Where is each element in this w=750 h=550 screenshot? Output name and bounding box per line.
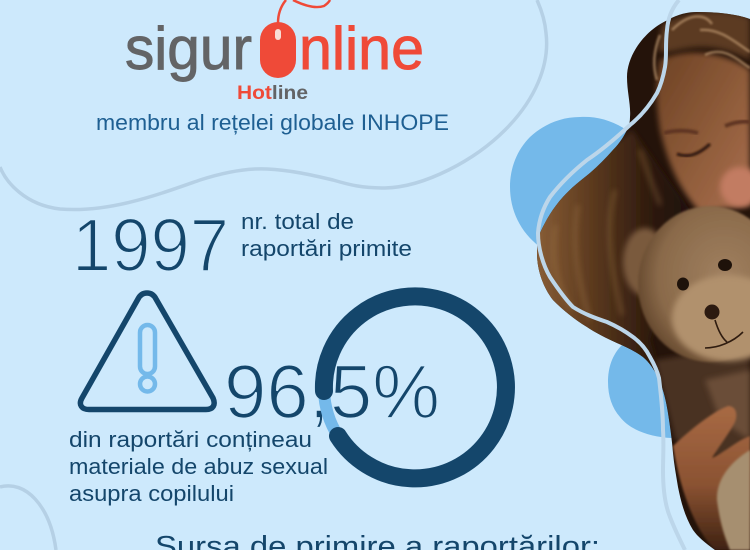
face — [657, 53, 750, 212]
logo subtitle: Hotline: Hotline — [237, 83, 308, 104]
stat: total reports label — [241, 209, 412, 261]
bear body — [654, 354, 750, 456]
stat: percentage description: din raportări conțineau — [69, 427, 312, 452]
icon: warning triangle — [80, 293, 214, 410]
bear muzzle — [672, 275, 750, 361]
stat: percentage description: asupra copilului — [69, 481, 234, 506]
bear body shading — [705, 370, 750, 440]
stat: percentage description — [69, 427, 328, 506]
logo word: sigur: sigur — [125, 15, 252, 82]
decorative outline: right blob — [538, 0, 685, 550]
sleeve — [717, 450, 750, 550]
stat: percentage description: materiale de abuz sexual — [69, 454, 328, 479]
bear head — [638, 206, 750, 362]
blue blob upper — [510, 117, 628, 247]
bear ear — [620, 225, 658, 297]
stat: total reports number: 1997 — [72, 203, 229, 287]
tagline: membru al rețelei globale INHOPE — [96, 110, 449, 135]
hair — [533, 130, 690, 375]
hair streaks — [554, 150, 660, 320]
blue blob lower — [608, 345, 672, 438]
hand — [673, 406, 750, 550]
closed eye — [677, 144, 710, 156]
eyebrow — [664, 122, 750, 133]
photo: child hugging teddy bear — [530, 0, 750, 550]
blonde hair strands — [654, 16, 750, 80]
decorative outline: bottom left blob — [0, 486, 56, 550]
nose and cheek — [720, 167, 750, 207]
icon: mouse — [260, 0, 330, 78]
bear nose — [704, 304, 720, 320]
bear eye left — [677, 278, 689, 290]
forehead hair — [658, 11, 750, 60]
bear mouth — [705, 320, 743, 348]
decorative outline: top blob — [0, 0, 547, 210]
stat: percentage: 96,5% — [224, 350, 440, 435]
logo word: nline: nline — [299, 15, 424, 82]
logo — [125, 0, 424, 104]
stat: total reports label: raportări primite — [241, 236, 412, 261]
donut chart 96.5% — [324, 296, 506, 478]
stat: total reports label: nr. total de — [241, 209, 354, 234]
bear eye right — [718, 259, 732, 271]
